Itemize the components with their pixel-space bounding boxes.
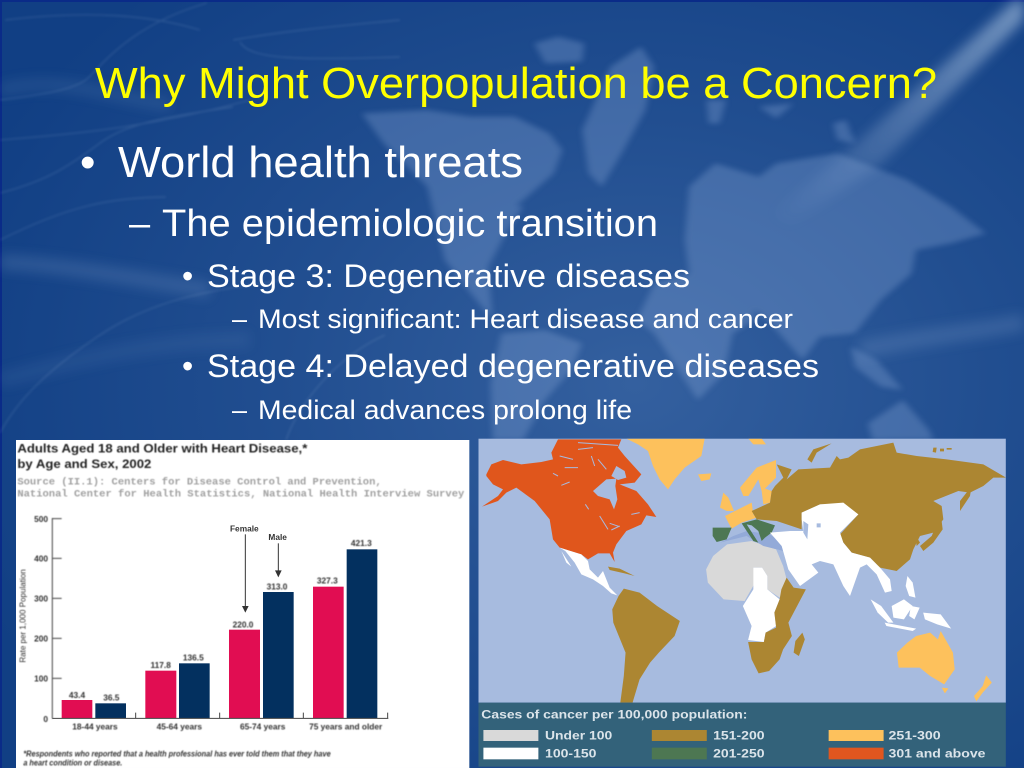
- bullet: stage 3: Stage 3: Degenerative diseases: [207, 258, 690, 294]
- chart source: [17, 476, 465, 500]
- chart title: by Age and Sex, 2002: [17, 457, 152, 471]
- value labels: 421.3: [351, 538, 372, 548]
- madagascar: [794, 633, 805, 656]
- chart title: [17, 441, 308, 471]
- mexico: [560, 548, 617, 595]
- greenland and iceland: [626, 439, 711, 489]
- age group labels: 75 years and older: [309, 722, 383, 732]
- caribbean: [608, 567, 635, 576]
- footnote: *Respondents who reported that a health professional has ever told them that they have: [23, 750, 331, 759]
- age group labels: 18-44 years: [72, 722, 118, 732]
- value labels: 117.8: [150, 660, 171, 670]
- legend: 251-300: 251-300: [889, 729, 941, 743]
- age group labels: 45-64 years: [157, 722, 202, 732]
- value labels: 136.5: [183, 653, 204, 663]
- japan and korea: [916, 521, 943, 551]
- value labels: [69, 538, 372, 702]
- sub-bullet: heart disease and cancer: Most significant: Heart disease and cancer: [258, 304, 793, 334]
- sub-bullet: medical advances: Medical advances prolong life: [258, 395, 632, 425]
- value labels: 327.3: [317, 576, 338, 586]
- sub-bullet: epidemiologic transition: –: [129, 203, 151, 245]
- background beam: [770, 0, 1024, 225]
- y axis: 500: [34, 514, 48, 524]
- central and south asia: [770, 503, 892, 596]
- legend: 201-250: 201-250: [713, 747, 765, 761]
- legend heading: Cases of cancer per 100,000 population:: [481, 708, 747, 722]
- x axis: [52, 713, 388, 718]
- chart title: Adults Aged 18 and Older with Heart Disease,*: [17, 441, 308, 455]
- legend: 301 and above: [829, 747, 986, 761]
- east and south africa: [748, 578, 806, 673]
- australia and new zealand: [897, 631, 992, 701]
- y axis: [18, 514, 62, 724]
- bullet: world health threats: •: [80, 138, 95, 187]
- legend: 301 and above: 301 and above: [889, 747, 986, 761]
- legend: 151-200: 151-200: [713, 729, 765, 743]
- north africa: [706, 541, 787, 601]
- bullet: world health threats: World health threats: [118, 138, 523, 187]
- legend: under 100: Under 100: [545, 729, 612, 743]
- faint world map: [362, 37, 986, 440]
- value labels: 220.0: [233, 620, 254, 630]
- y axis: 100: [34, 674, 48, 684]
- sub-bullet: heart disease and cancer: –: [232, 304, 247, 334]
- north america: [482, 439, 656, 562]
- bullet: stage 3: •: [182, 258, 193, 294]
- eurasia: [713, 439, 1006, 596]
- bullet list: [80, 138, 819, 425]
- legend: 201-250: [652, 747, 765, 761]
- chart source: Source (II.1): Centers for Disease Control and Prevention,: [17, 476, 382, 487]
- panel: heart disease chart: [16, 440, 469, 768]
- chart source: National Center for Health Statistics, National Health Interview Survey: [17, 489, 465, 500]
- italy and balkans: [742, 519, 775, 543]
- female arrow: [230, 523, 259, 613]
- footnote: [23, 750, 331, 768]
- central africa: [743, 568, 780, 642]
- caspian and aral seas: [803, 521, 821, 539]
- legend: under 100: [483, 729, 612, 743]
- female arrow: Female: [230, 523, 259, 533]
- footnote: a heart condition or disease.: [23, 759, 122, 768]
- legend: 151-200: [652, 729, 765, 743]
- south america: [612, 589, 680, 703]
- southeast asia islands: [871, 576, 951, 631]
- y axis: 400: [34, 554, 48, 564]
- title: Why Might Overpopulation be a Concern?: [95, 59, 937, 108]
- y axis: 200: [34, 634, 48, 644]
- value labels: 36.5: [103, 692, 120, 702]
- age group labels: [72, 722, 383, 732]
- bullet: stage 4: Stage 4: Delayed degenerative diseases: [207, 348, 819, 384]
- bullet: stage 4: •: [182, 348, 193, 384]
- hudson bay and lakes: [553, 443, 640, 530]
- western hemisphere north: [482, 439, 711, 595]
- value labels: 43.4: [69, 690, 85, 700]
- value labels: 313.0: [267, 582, 288, 592]
- spain: [713, 528, 732, 542]
- continents: [482, 439, 1006, 703]
- background swirl lines: [0, 3, 400, 440]
- y axis: 0: [43, 714, 48, 724]
- y axis: Rate per 1,000 Population: [18, 569, 28, 663]
- y axis: 300: [34, 594, 48, 604]
- arctic islands and sakhalin: [807, 443, 972, 511]
- legend: 100-150: [483, 747, 597, 761]
- age group labels: 65-74 years: [240, 722, 286, 732]
- russia and china: [752, 443, 1006, 571]
- southern continents: [612, 541, 992, 703]
- male arrow: Male: [268, 532, 287, 542]
- northern europe: [720, 460, 776, 529]
- legend: [479, 703, 1006, 767]
- legend: 251-300: [829, 729, 941, 743]
- sub-bullet: medical advances: –: [232, 395, 247, 425]
- legend: 100-150: 100-150: [545, 747, 597, 761]
- svalbard: [748, 439, 766, 444]
- map ocean: [478, 439, 1006, 703]
- panel: cancer world map: [478, 439, 1006, 767]
- male arrow: [268, 532, 287, 577]
- mediterranean: [720, 531, 783, 551]
- bars: [62, 549, 377, 718]
- background haze: [0, 85, 1024, 380]
- sub-bullet: epidemiologic transition: The epidemiologic transition: [162, 203, 658, 245]
